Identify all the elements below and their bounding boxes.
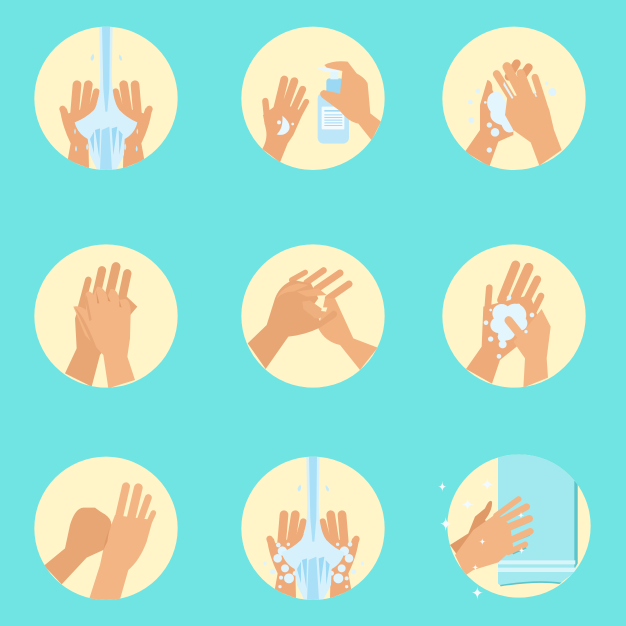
circle backdrop — [241, 244, 385, 388]
water stream — [75, 25, 137, 170]
hand — [455, 499, 530, 576]
open hand — [88, 486, 153, 602]
foam — [490, 304, 527, 342]
hands — [60, 85, 152, 168]
soap gap — [321, 307, 327, 312]
water drops — [298, 484, 329, 492]
water stream — [282, 455, 344, 600]
hand pressing pump — [320, 61, 381, 140]
soap bottle — [316, 66, 349, 144]
soap dollop — [277, 116, 290, 135]
bubbles — [468, 82, 556, 153]
panel: step 9 dry with towel — [438, 452, 591, 600]
panel: step 2 apply soap — [241, 27, 385, 170]
foam — [263, 542, 364, 588]
circle backdrop — [442, 27, 586, 170]
circle backdrop — [447, 454, 591, 598]
lower hand — [292, 270, 378, 370]
panel: step 1 rinse hands under water — [34, 25, 178, 170]
hands — [267, 515, 359, 598]
finger shadows — [510, 524, 530, 554]
fist — [44, 508, 111, 584]
front hand — [73, 287, 135, 388]
back hand — [450, 501, 493, 557]
circle backdrop — [241, 457, 385, 600]
towel — [450, 452, 578, 586]
front hand — [509, 309, 551, 388]
back hand — [465, 80, 513, 167]
panel: step 3 rub palms over back of hand — [442, 27, 586, 170]
panel: step 8 rinse soapy hands — [241, 455, 385, 600]
circle backdrop — [34, 244, 178, 388]
circle backdrop — [34, 457, 178, 600]
circle backdrop — [241, 27, 385, 170]
circle backdrop — [442, 244, 586, 388]
front hand — [497, 67, 562, 166]
panel: step 5 interlaced fingers — [241, 244, 385, 388]
panel: step 6 foam in palm — [442, 244, 586, 388]
circle backdrop — [34, 27, 178, 170]
water drops — [74, 54, 138, 152]
bubbles — [484, 295, 534, 359]
rear hand — [65, 267, 137, 387]
panel: step 4 palm over back of hand — [34, 244, 178, 388]
upper hand — [248, 280, 337, 369]
rear hand — [466, 265, 541, 384]
sparkles — [438, 477, 525, 600]
open hand with soap — [262, 80, 306, 162]
soap foam — [487, 92, 513, 132]
panel: step 7 fist rubbing palm — [34, 457, 178, 602]
